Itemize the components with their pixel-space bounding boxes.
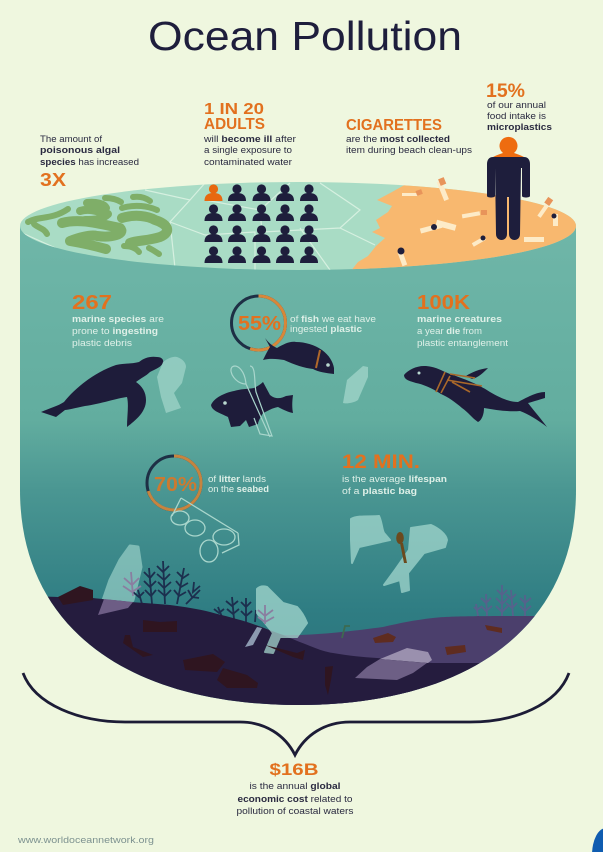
text: 1 in 20 adults: ADULTS: [204, 116, 265, 133]
text: algal species: 3X: [40, 170, 66, 190]
icon: seal with rope: [404, 366, 547, 427]
bent straw: [342, 626, 350, 638]
icon: plastic bottle: [343, 366, 368, 403]
stat: 70% donut: [147, 456, 269, 510]
stat: 55% donut: 55%: [238, 313, 281, 335]
disc: ocean surface: [20, 177, 590, 272]
stat: $16B cost: is the annual global: [250, 781, 340, 791]
stat: 100K marine creatures: marine creatures: [417, 314, 502, 324]
seabed and litter: [48, 572, 535, 705]
coral dark: [133, 561, 256, 622]
text: 1 in 20 adults: [203, 101, 296, 167]
people grid: [204, 184, 318, 263]
stat: 70% donut: of litter lands: [208, 474, 267, 484]
brown rocks on light seabed: [373, 625, 502, 655]
corner badge: [592, 828, 603, 852]
icon: six-pack rings: [171, 498, 239, 562]
text: 1 in 20 adults: will become ill after: [203, 134, 296, 144]
text: microplastics: of our annual: [487, 100, 546, 110]
stat: 267 marine species: marine species are: [72, 314, 164, 324]
stat: 12 min: is the average lifespan: [342, 474, 447, 484]
bag on seabed: [257, 586, 307, 653]
stat: 100K marine creatures: [417, 292, 509, 348]
stat: 100K marine creatures: plastic entanglement: [417, 338, 509, 348]
stat: 12 min: [342, 452, 447, 496]
light purple seabed: [270, 616, 535, 705]
text: microplastics: food intake is: [487, 111, 547, 121]
text: algal species: The amount of: [40, 134, 103, 144]
text: algal species: species has increased: [40, 157, 139, 167]
bottle on seabed, upper part: [98, 546, 141, 615]
stat: 70% donut: on the seabed: [208, 484, 269, 494]
text: cigarettes: [346, 117, 473, 155]
brace: [23, 673, 569, 755]
ocean cylinder body: [20, 226, 576, 705]
coral pink: [123, 572, 274, 624]
icon: spoon: [396, 532, 407, 563]
stat: 55% donut: [232, 296, 376, 350]
stat: 12 min: of a plastic bag: [342, 486, 417, 496]
stat: 12 min: 12 MIN.: [342, 452, 420, 473]
coral purple: [474, 585, 531, 616]
beach: [352, 185, 576, 270]
stat: 267 marine species: 267: [72, 292, 112, 314]
text: algal species: [40, 134, 139, 190]
text: 1 in 20 adults: 1 IN 20: [204, 101, 264, 118]
text: microplastics: [486, 81, 552, 132]
stat: 55% donut: ingested plastic: [290, 324, 362, 334]
bottle on seabed, lower part: [98, 599, 133, 615]
stat: $16B cost: $16B: [270, 760, 318, 779]
water cracks: [20, 183, 375, 270]
cigarette butts: [398, 177, 558, 266]
bag handle: [245, 627, 262, 647]
text: cigarettes: CIGARETTES: [346, 117, 442, 134]
stat: $16B cost: economic cost related to: [238, 794, 352, 804]
text: cigarettes: item during beach clean-ups: [346, 145, 473, 155]
stat: 55% donut: of fish we eat have: [290, 314, 376, 324]
stat: 100K marine creatures: 100K: [417, 292, 471, 314]
icon: turtle: [41, 357, 163, 427]
stat: 100K marine creatures: a year die from: [417, 326, 482, 336]
stat: 267 marine species: [72, 292, 164, 348]
title: Ocean Pollution: [148, 13, 462, 59]
icon: plastic bag left: [351, 516, 390, 563]
stat: $16B cost: [236, 760, 354, 816]
icon: fish with cutlery: [211, 366, 293, 437]
icon: fish with strap: [263, 338, 334, 374]
icon: plastic bag right: [384, 525, 447, 592]
stat: $16B cost: pollution of coastal waters: [236, 806, 354, 816]
algae: [28, 197, 167, 254]
brown rocks: [58, 586, 333, 695]
icon: person with orange head: [487, 137, 530, 240]
icon: plastic bag near turtle: [157, 357, 186, 413]
stat: 267 marine species: prone to ingesting: [72, 326, 158, 336]
stat: 267 marine species: plastic debris: [72, 338, 133, 348]
bag lower right: [355, 648, 432, 680]
website url: www.worldoceannetwork.org: [17, 835, 154, 846]
text: cigarettes: are the most collected: [346, 134, 450, 144]
dark purple seabed: [48, 596, 480, 705]
text: microplastics: 15%: [486, 81, 525, 102]
stat: 70% donut: 70%: [154, 474, 197, 496]
text: microplastics: microplastics: [487, 122, 552, 132]
text: 1 in 20 adults: a single exposure to: [204, 145, 292, 155]
text: algal species: poisonous algal: [40, 145, 120, 155]
text: 1 in 20 adults: contaminated water: [204, 157, 292, 167]
